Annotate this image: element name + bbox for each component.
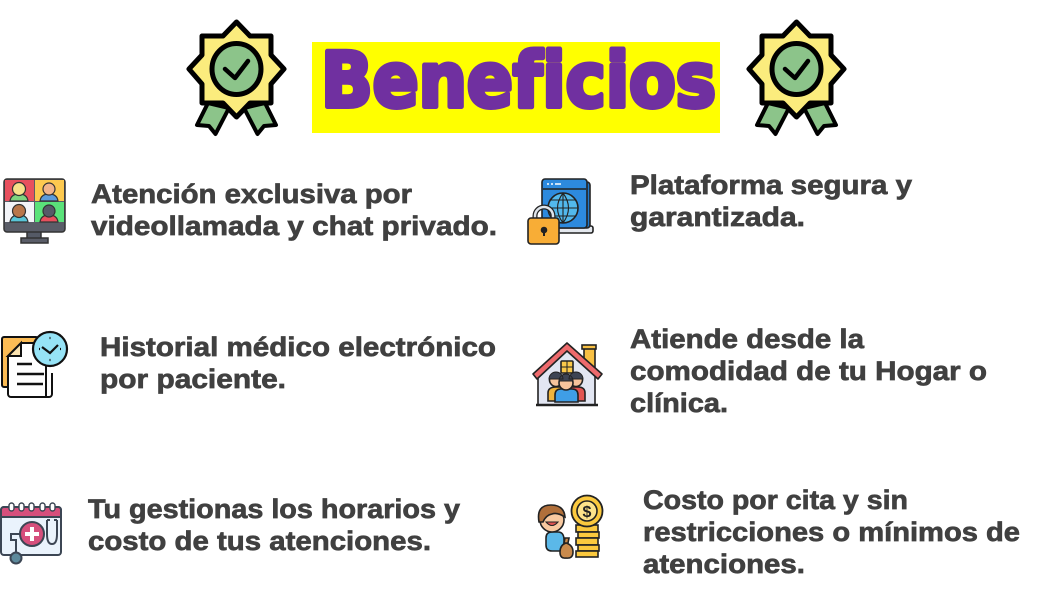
title: Beneficios: Beneficios xyxy=(321,36,716,124)
text: video call benefit: videollamada y chat privado. xyxy=(91,211,497,241)
text: video call benefit: Atención exclusiva por xyxy=(91,179,413,209)
text: secure platform benefit: garantizada. xyxy=(630,202,805,232)
icon: right award badge xyxy=(749,22,844,134)
benefit: comfort of home or clinic xyxy=(533,324,987,418)
text: cost benefit: atenciones. xyxy=(643,549,805,579)
icon: house with family xyxy=(533,343,602,405)
benefit: manage schedule and fees xyxy=(1,494,460,564)
text: schedule benefit: Tu gestionas los horarios y xyxy=(88,494,460,524)
text: medical record benefit: por paciente. xyxy=(100,364,286,394)
icon: person with coins: $ xyxy=(583,504,592,521)
benefit: secure platform xyxy=(528,170,912,244)
text: cost benefit: Costo por cita y sin xyxy=(643,485,908,515)
icon: document with clock xyxy=(2,332,67,397)
icon: padlock and browser globe xyxy=(528,179,593,244)
text: home or clinic benefit: clínica. xyxy=(630,388,728,418)
text: home or clinic benefit: Atiende desde la xyxy=(630,324,865,354)
icon: left award badge xyxy=(189,22,284,134)
icon: person with coins xyxy=(538,496,602,558)
icon: calendar with stethoscope xyxy=(1,503,61,564)
text: medical record benefit: Historial médico electrónico xyxy=(100,332,496,362)
benefit: electronic medical record xyxy=(2,332,496,397)
icon: video call monitor xyxy=(4,179,65,243)
benefit: cost per appointment xyxy=(538,485,1020,579)
text: secure platform benefit: Plataforma segura y xyxy=(630,170,912,200)
text: home or clinic benefit: comodidad de tu Hogar o xyxy=(630,356,987,386)
text: schedule benefit: costo de tus atenciones. xyxy=(88,526,431,556)
benefit: video call and private chat xyxy=(4,179,497,243)
text: cost benefit: restricciones o mínimos de xyxy=(643,517,1020,547)
